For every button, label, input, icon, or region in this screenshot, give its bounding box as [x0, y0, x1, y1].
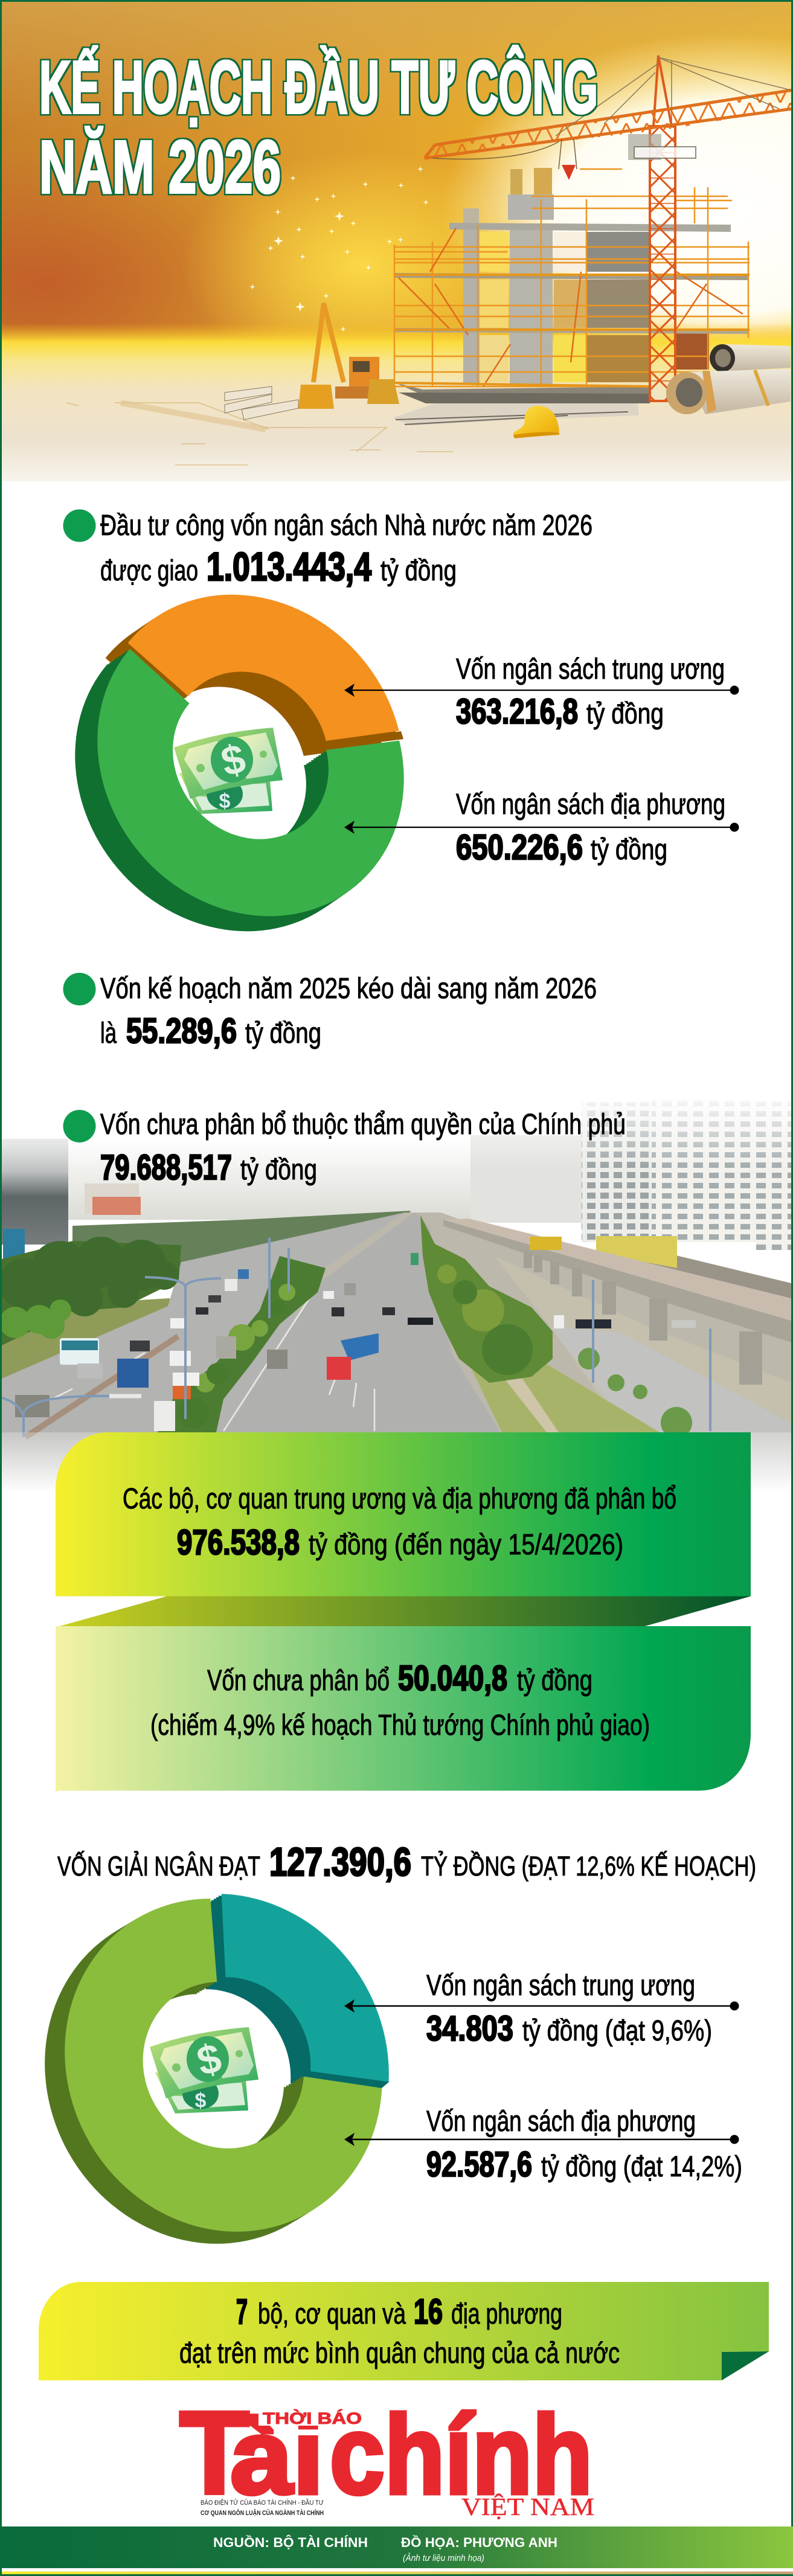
icon: sparkles — [249, 166, 429, 332]
panel: allocated capital: tỷ đồng (đến ngày 15/4/2026) — [309, 1529, 623, 1561]
icon: banknotes: $ — [195, 2089, 207, 2112]
icon: excavator — [298, 303, 399, 409]
segment: central budget — [34, 532, 467, 970]
ring extrusion — [0, 1837, 446, 2302]
photo fades — [0, 1093, 793, 1168]
right ground: dirt and service road — [494, 1256, 791, 1498]
panel: unallocated capital: Vốn chưa phân bổ — [207, 1665, 390, 1697]
logo: T — [179, 2387, 249, 2519]
bullet: unallocated government capital: tỷ đồng — [240, 1154, 317, 1186]
icon: building — [394, 168, 750, 403]
logo: THỜI BÁO — [263, 2409, 362, 2427]
bullet: unallocated government capital: Vốn chưa phân bổ thuộc thẩm quyền của Chính phủ — [100, 1109, 626, 1141]
panel: above national average: 16 — [414, 2292, 443, 2331]
heading: disbursement — [57, 1839, 756, 1884]
seam between segments — [326, 731, 403, 749]
icon: tower crane — [425, 56, 793, 401]
panel: unallocated capital: tỷ đồng — [517, 1665, 592, 1697]
arrow: local budget — [344, 2133, 739, 2146]
bullet: extended 2025 capital: tỷ đồng — [245, 1017, 321, 1049]
sky — [2, 1135, 791, 1220]
label: central budget — [456, 653, 725, 731]
icon: stacked boards — [393, 403, 639, 426]
title: NĂM 2026 — [39, 126, 281, 209]
left roadway — [2, 1213, 405, 1498]
donut chart 1 — [11, 532, 739, 994]
icon: banknotes: $ — [217, 735, 250, 785]
bullet: total public investment: 1.013.443,4 — [207, 544, 371, 589]
street lamps — [2, 1238, 710, 1437]
panel: above national average: đạt trên mức bình quân chung của cả nước — [179, 2337, 620, 2369]
icon: paper rolls — [666, 344, 791, 414]
seam between segments — [301, 2071, 390, 2088]
arrow: central budget — [344, 684, 739, 697]
label: local budget disbursed — [426, 2106, 742, 2184]
icon: blueprint lines on floor — [66, 403, 453, 465]
logo: ài — [231, 2398, 324, 2516]
bullet: total public investment: tỷ đồng — [380, 555, 457, 587]
panel: above national average: bộ, cơ quan và — [258, 2298, 406, 2330]
panel: above national average: 7 — [236, 2292, 248, 2331]
bullet: extended 2025 capital — [63, 973, 597, 1051]
panel: allocated capital: 976.538,8 — [177, 1523, 300, 1562]
icon: scaffolding — [394, 169, 750, 386]
vehicles — [15, 1253, 696, 1431]
panel: allocated capital — [56, 1432, 751, 1597]
ring extrusion — [11, 534, 464, 994]
panel: unallocated capital — [56, 1626, 751, 1792]
ribbon fold — [60, 1597, 751, 1626]
logo — [179, 2387, 594, 2520]
logo: BÁO ĐIỆN TỬ CỦA BÁO TÀI CHÍNH - ĐẦU TƯ — [201, 2499, 324, 2507]
label: central budget: Vốn ngân sách trung ương — [456, 653, 725, 685]
arrow: local budget — [344, 821, 739, 834]
logo: chính — [330, 2393, 592, 2517]
lane markings — [48, 1282, 374, 1431]
segment: local budget — [34, 540, 467, 979]
label: central budget: tỷ đồng — [586, 698, 664, 730]
label: central budget disbursed: Vốn ngân sách trung ương — [426, 1970, 695, 2002]
heading: disbursement: 127.390,6 — [269, 1839, 411, 1884]
grass strip — [469, 1363, 660, 1432]
label: central budget disbursed: 34.803 — [426, 2009, 513, 2048]
panel: above national average: địa phương — [451, 2298, 562, 2330]
right roadway — [205, 1213, 510, 1498]
bullet: extended 2025 capital: Vốn kế hoạch năm 2025 kéo dài sang năm 2026 — [100, 973, 597, 1005]
label: local budget — [456, 789, 725, 867]
label: central budget disbursed: tỷ đồng (đạt 9,6%) — [522, 2015, 712, 2047]
icon: banknotes — [174, 728, 283, 814]
icon: banknotes: $ — [193, 2035, 226, 2084]
footer: ĐỒ HỌA: PHƯƠNG ANH — [401, 2535, 557, 2550]
bullet: extended 2025 capital: 55.289,6 — [126, 1011, 237, 1051]
label: central budget: 363.216,8 — [456, 692, 578, 731]
arrow: central budget — [344, 1999, 739, 2013]
label: local budget disbursed: tỷ đồng (đạt 14,2%) — [541, 2151, 742, 2183]
base ground — [2, 1213, 791, 1498]
label: local budget: 650.226,6 — [456, 828, 583, 867]
left grass — [2, 1298, 179, 1380]
footer: (Ảnh tư liệu minh họa) — [403, 2552, 484, 2563]
left trees — [0, 1237, 181, 1345]
heading: disbursement: VỐN GIẢI NGÂN ĐẠT — [57, 1851, 260, 1882]
bullet: extended 2025 capital: là — [100, 1017, 117, 1049]
icon: helmet — [513, 406, 559, 438]
hero banner — [0, 0, 793, 481]
bullet: total public investment: được giao — [100, 555, 198, 587]
label: local budget disbursed: Vốn ngân sách địa phương — [426, 2106, 696, 2138]
pink median — [25, 1336, 178, 1437]
panel: unallocated capital: (chiếm 4,9% kế hoạch Thủ tướng Chính phủ giao) — [150, 1709, 650, 1741]
photo: highway and metro line — [0, 1093, 793, 1510]
icon: banknotes: $ — [219, 790, 231, 813]
donut chart 2 — [0, 1836, 742, 2302]
footer — [0, 2526, 793, 2576]
footer: NGUỒN: BỘ TÀI CHÍNH — [213, 2535, 368, 2550]
segment: central budget — [11, 1836, 449, 2285]
label: local budget: tỷ đồng — [591, 834, 667, 866]
panel: unallocated capital: 50.040,8 — [398, 1659, 507, 1698]
towers — [2, 1099, 791, 1265]
bullet: unallocated government capital — [63, 1109, 626, 1187]
icon: banknotes — [150, 2027, 258, 2113]
logo: VIỆT NAM — [461, 2493, 594, 2520]
icon: pipes — [225, 386, 298, 420]
panel: above national average — [39, 2282, 769, 2380]
logo: CƠ QUAN NGÔN LUẬN CỦA NGÀNH TÀI CHÍNH — [201, 2509, 324, 2517]
centre trees — [420, 1215, 692, 1438]
bullet: total public investment — [63, 510, 592, 589]
label: central budget disbursed — [426, 1970, 712, 2048]
segment: local budget — [4, 1841, 443, 2290]
bullet: total public investment: Đầu tư công vốn ngân sách Nhà nước năm 2026 — [100, 510, 592, 542]
title — [39, 46, 598, 209]
median hedge — [158, 1256, 326, 1432]
bullet: unallocated government capital: 79.688,517 — [100, 1148, 232, 1187]
background trees — [72, 1211, 411, 1268]
label: local budget disbursed: 92.587,6 — [426, 2145, 532, 2184]
elevated metro viaduct — [443, 1219, 791, 1385]
